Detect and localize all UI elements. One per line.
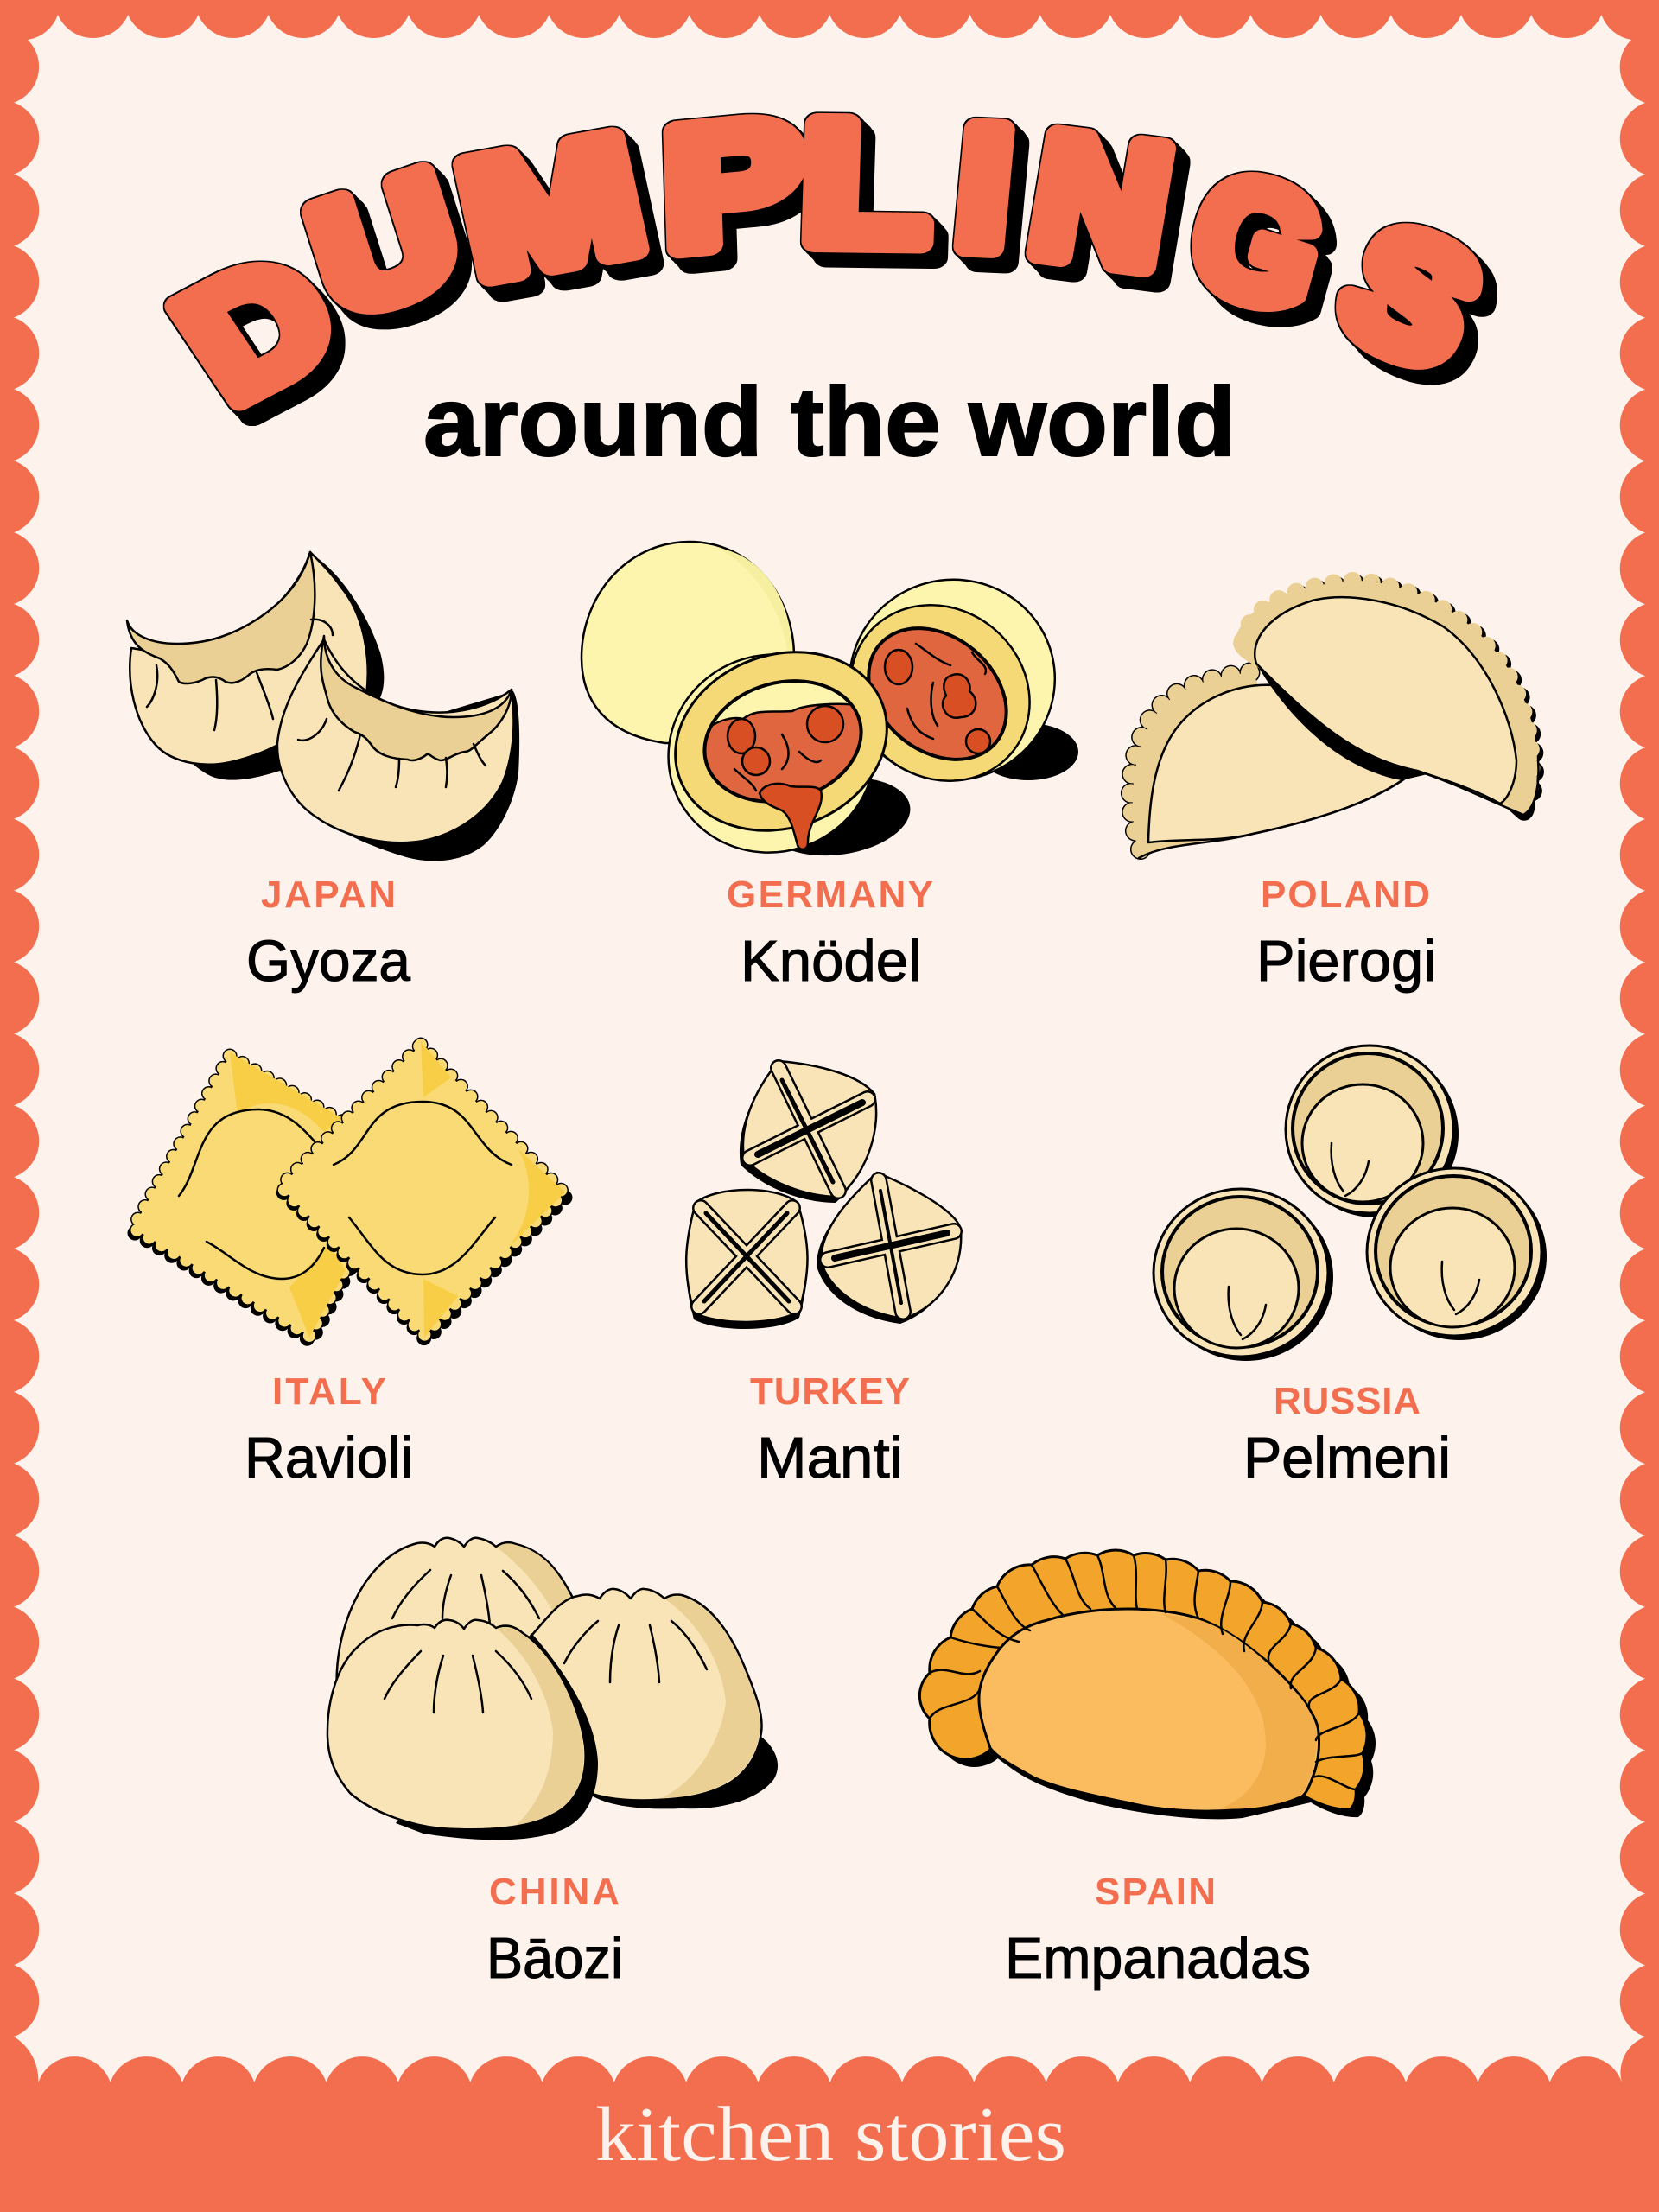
dumpling name: Bāozi <box>486 1926 623 1991</box>
title: DUMPLINGS arched lettering: S <box>1317 188 1505 404</box>
country label: POLAND <box>1261 874 1430 916</box>
icon: ravioli <box>133 1041 565 1341</box>
panel: Turkey manti <box>686 1061 961 1491</box>
icon: pierogi dumplings <box>1131 581 1538 858</box>
title: DUMPLINGS arched lettering: M <box>445 100 658 313</box>
icon: baozi buns <box>327 1538 778 1840</box>
title: DUMPLINGS arched lettering: N <box>1020 98 1182 304</box>
title: DUMPLINGS arched lettering: L <box>800 87 931 279</box>
icon: empanada <box>919 1550 1376 1819</box>
panel: Poland pierogi <box>1131 581 1538 994</box>
title: DUMPLINGS arched lettering: I <box>950 92 1019 284</box>
icon: pelmeni dumplings <box>1154 1046 1547 1361</box>
dumpling name: Manti <box>757 1426 903 1491</box>
panel: Russia pelmeni <box>1154 1046 1547 1491</box>
icon: knodel dumplings <box>582 542 1078 880</box>
panel: Germany knodel <box>582 542 1078 994</box>
dumpling name: Ravioli <box>245 1426 413 1491</box>
country label: CHINA <box>489 1871 620 1913</box>
dumpling name: Knödel <box>741 929 921 994</box>
pelmeni bottom left <box>1154 1189 1333 1361</box>
panel: Spain empanada <box>919 1550 1376 1991</box>
panel: China baozi <box>327 1538 778 1991</box>
icon: manti dumplings <box>686 1061 961 1329</box>
subtitle: around the world: around the world <box>423 367 1236 476</box>
dumpling name: Pierogi <box>1256 929 1436 994</box>
title: DUMPLINGS arched lettering: P <box>662 85 805 285</box>
manti bottom right <box>817 1173 961 1324</box>
manti bottom left <box>686 1190 808 1329</box>
title: DUMPLINGS arched lettering: D <box>146 220 367 435</box>
country label: RUSSIA <box>1274 1380 1421 1422</box>
country label: TURKEY <box>750 1370 910 1413</box>
country label: ITALY <box>272 1370 386 1413</box>
title: DUMPLINGS arched lettering <box>146 85 1505 435</box>
footer brand: kitchen stories: kitchen stories <box>595 2092 1066 2177</box>
pelmeni top <box>1286 1046 1459 1217</box>
country label: SPAIN <box>1095 1871 1216 1913</box>
dumpling name: Empanadas <box>1005 1926 1311 1991</box>
pelmeni right <box>1367 1168 1547 1340</box>
title: DUMPLINGS arched lettering: G <box>1174 137 1340 348</box>
manti top <box>740 1061 876 1203</box>
country label: GERMANY <box>727 874 933 916</box>
title: DUMPLINGS arched lettering: U <box>294 139 475 349</box>
icon: gyoza dumplings <box>127 552 519 861</box>
country label: JAPAN <box>261 874 396 916</box>
dumpling name: Gyoza <box>246 929 411 994</box>
dumpling name: Pelmeni <box>1243 1426 1451 1491</box>
panel: Italy ravioli <box>133 1041 565 1491</box>
panel: Japan gyoza <box>127 552 519 994</box>
